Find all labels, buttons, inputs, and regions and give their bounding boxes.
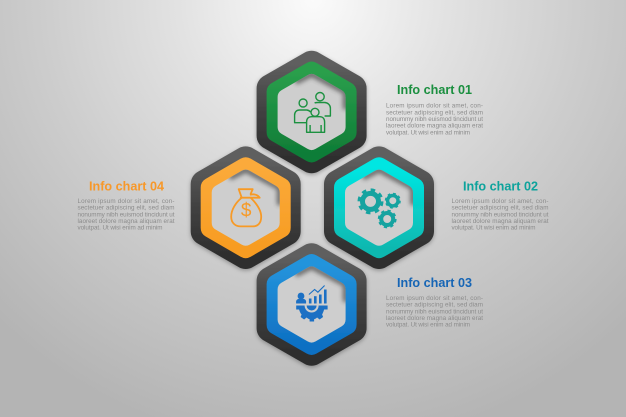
panel: hexagon 03 blue xyxy=(271,257,353,352)
body 04 xyxy=(78,198,175,232)
icon: dollar sign: $ xyxy=(241,201,252,222)
panel: hexagon 04 orange xyxy=(205,160,287,255)
body 02: sectetuer adipiscing elit, sed diam xyxy=(452,205,548,212)
body 01: volutpat. Ut wisi enim ad minim xyxy=(386,129,470,136)
heading 03: Info chart 03 xyxy=(397,275,472,290)
body 04: Lorem ipsum dolor sit amet, con- xyxy=(78,198,174,205)
heading 02: Info chart 02 xyxy=(463,178,538,194)
body 02: Lorem ipsum dolor sit amet, con- xyxy=(452,198,548,205)
body 03: volutpat. Ut wisi enim ad minim xyxy=(386,322,470,329)
body 01 xyxy=(386,103,483,136)
body 03: nonummy nibh euismod tincidunt ut xyxy=(386,308,483,315)
body 04: laoreet dolore magna aliquam erat xyxy=(78,218,175,225)
body 04: volutpat. Ut wisi enim ad minim xyxy=(78,225,162,232)
icon: gears xyxy=(359,190,400,227)
panel: hexagon 01 green xyxy=(271,65,353,159)
body 02 xyxy=(452,198,549,232)
body 01: laoreet dolore magna aliquam erat xyxy=(386,123,483,130)
icon: gear with person and growth chart xyxy=(296,290,328,322)
heading 01: Info chart 01 xyxy=(397,82,472,97)
body 01: Lorem ipsum dolor sit amet, con- xyxy=(386,103,483,110)
body 03: Lorem ipsum dolor sit amet, con- xyxy=(386,295,483,302)
body 02: nonummy nibh euismod tincidunt ut xyxy=(452,211,549,218)
body 03 xyxy=(386,295,483,329)
panel: hexagon 02 teal xyxy=(338,160,420,255)
body 03: sectetuer adipiscing elit, sed diam xyxy=(386,302,483,309)
body 01: sectetuer adipiscing elit, sed diam xyxy=(386,109,483,116)
heading 04: Info chart 04 xyxy=(89,178,165,194)
body 03: laoreet dolore magna aliquam erat xyxy=(386,315,483,322)
text block: info chart 04 xyxy=(78,178,175,232)
body 01: nonummy nibh euismod tincidunt ut xyxy=(386,116,483,123)
icon: people xyxy=(295,92,330,132)
body 04: sectetuer adipiscing elit, sed diam xyxy=(78,205,174,212)
body 02: volutpat. Ut wisi enim ad minim xyxy=(452,225,536,232)
text block: info chart 03 xyxy=(386,275,483,329)
body 04: nonummy nibh euismod tincidunt ut xyxy=(78,211,175,218)
body 02: laoreet dolore magna aliquam erat xyxy=(452,218,549,225)
text block: info chart 02 xyxy=(452,178,549,232)
icon: growth arrow xyxy=(309,286,325,294)
text block: info chart 01 xyxy=(386,82,483,136)
